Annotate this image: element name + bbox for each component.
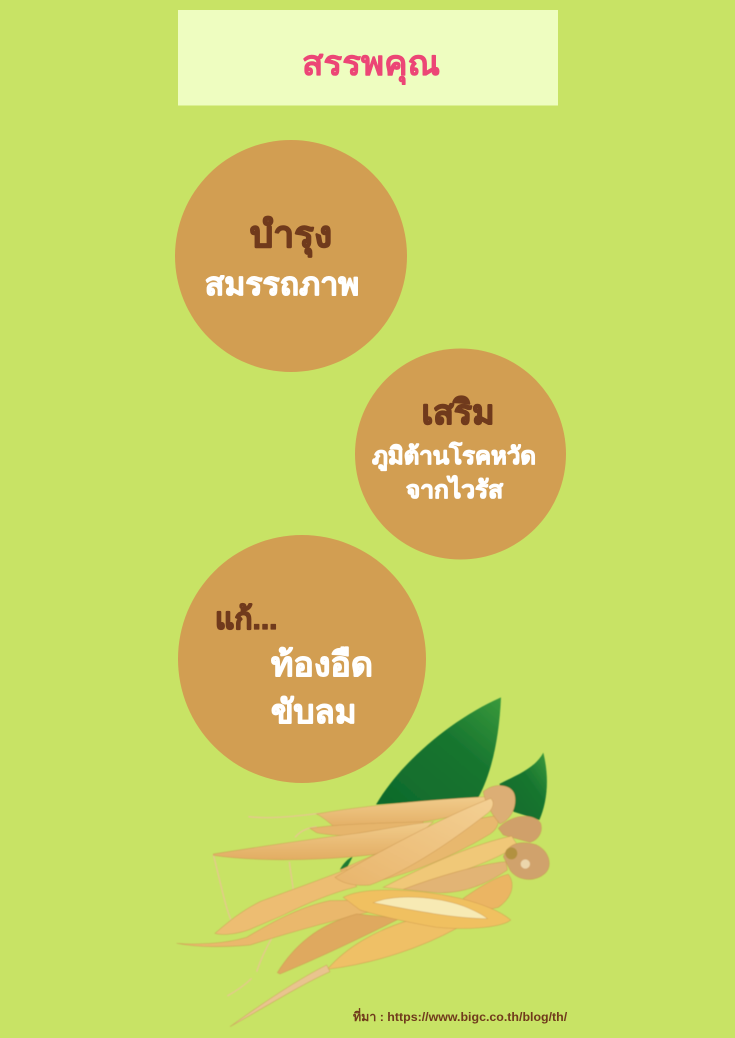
- text: bloating: ท้องอืด: [271, 646, 373, 684]
- root: large diagonal: [335, 798, 493, 885]
- root: lower middle: [403, 862, 507, 893]
- icon: large leaf: [376, 697, 501, 805]
- text: from viruses: จากไวรัส: [406, 475, 503, 504]
- circle: relieves: [178, 535, 426, 783]
- root: bottom wide: [277, 914, 400, 974]
- icon: small leaf: [499, 753, 547, 820]
- source note: ที่มา : https://www.bigc.co.th/blog/th/: [353, 1008, 568, 1024]
- root: lower tail: [230, 965, 330, 1027]
- title panel: [178, 10, 558, 106]
- root: right tip: [463, 874, 512, 913]
- root: thin diagonal: [177, 900, 370, 947]
- root: sliced piece: [343, 890, 511, 929]
- root: second: [310, 822, 423, 836]
- root: back right: [340, 816, 498, 885]
- fine rootlets: [213, 813, 320, 996]
- knob: upper rhizome: [483, 785, 515, 824]
- knob: lower rhizome: [503, 843, 549, 879]
- root: long left: [213, 822, 433, 860]
- text: immunity against colds: ภูมิต้านโรคหวัด: [372, 441, 536, 471]
- text: carminative: ขับลม: [271, 693, 356, 730]
- illustration: fingerroot with leaves: [177, 697, 549, 1027]
- root: bottom cut: [327, 920, 457, 969]
- title text: สรรพคุณ: [302, 44, 440, 85]
- root: top: [317, 797, 487, 829]
- knob: middle rhizome: [498, 816, 541, 842]
- root: bottom long: [215, 869, 357, 934]
- circle: boost immunity: [355, 348, 566, 560]
- text: stamina: สมรรถภาพ: [205, 266, 359, 302]
- roots group: [177, 785, 549, 1027]
- circle: nourish stamina: [175, 140, 407, 372]
- heading: nourish: บำรุง: [250, 214, 332, 258]
- heading: relieves: แก้...: [215, 603, 278, 636]
- root: lower right: [383, 836, 517, 889]
- heading: boost: เสริม: [421, 394, 495, 432]
